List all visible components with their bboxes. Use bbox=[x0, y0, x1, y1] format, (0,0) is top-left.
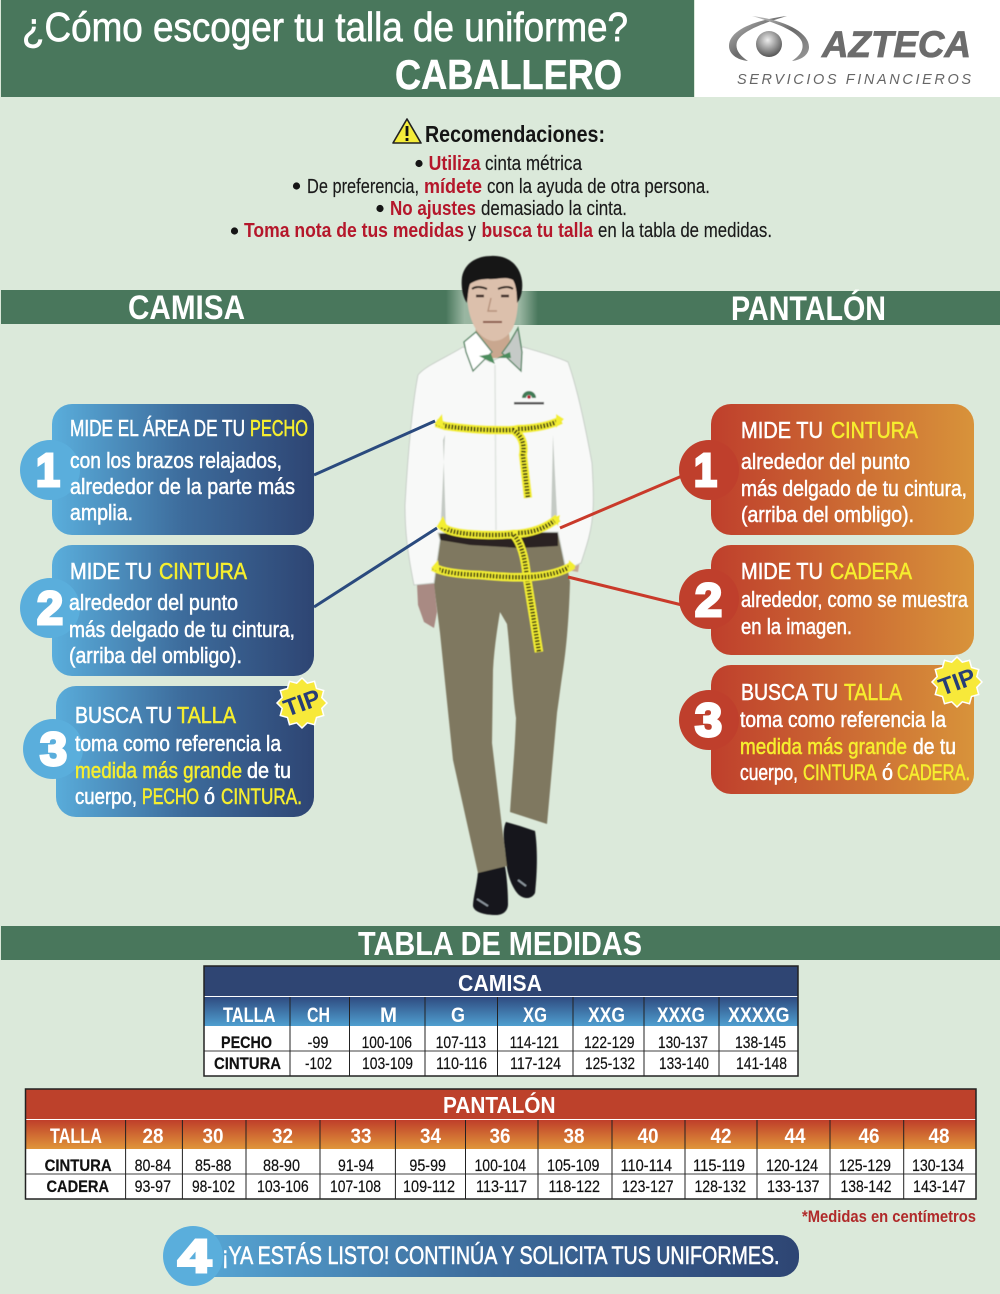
hair bbox=[462, 256, 522, 303]
subtitle: caballero: CABALLERO bbox=[395, 51, 622, 98]
recommendation 1: cinta métrica bbox=[485, 153, 583, 175]
recommendation 1: Utiliza bbox=[429, 153, 481, 175]
size header row: 33 bbox=[350, 1125, 372, 1148]
cadera row: 93-97 bbox=[135, 1177, 171, 1196]
step heading: BUSCA TU bbox=[741, 679, 838, 705]
size header row: 34 bbox=[420, 1125, 441, 1148]
facial features bbox=[472, 287, 513, 322]
cintura row: 125-129 bbox=[839, 1156, 891, 1175]
cadera row bbox=[46, 1177, 966, 1196]
cintura row: 130-134 bbox=[912, 1156, 964, 1175]
step heading: PECHO bbox=[250, 415, 308, 441]
cintura row: CINTURA bbox=[214, 1054, 281, 1073]
table title: PANTALÓN bbox=[443, 1091, 556, 1118]
step text: CADERA. bbox=[897, 760, 970, 785]
step text bbox=[70, 448, 295, 525]
size header row: XXXXG bbox=[728, 1004, 790, 1027]
icon: tip badge: TIP bbox=[935, 663, 979, 702]
step heading: BUSCA TU bbox=[75, 702, 172, 728]
number 1: 1 bbox=[36, 444, 60, 496]
header banner bbox=[1, 0, 694, 98]
recommendation 4: Toma nota de tus medidas bbox=[244, 220, 464, 242]
cadera row: 133-137 bbox=[767, 1177, 820, 1196]
shirt shading bbox=[441, 435, 557, 530]
cadera row: 143-147 bbox=[913, 1177, 966, 1196]
step heading: TALLA bbox=[177, 702, 237, 728]
step heading bbox=[741, 558, 913, 584]
icon: tip badge: TIP bbox=[280, 684, 324, 723]
size header row: 42 bbox=[710, 1125, 732, 1148]
step text: amplia. bbox=[70, 500, 133, 525]
size header row: 48 bbox=[928, 1125, 950, 1148]
step heading bbox=[70, 558, 248, 584]
cadera row: 107-108 bbox=[330, 1177, 381, 1196]
pecho row bbox=[221, 1033, 786, 1052]
pecho row: 114-121 bbox=[510, 1033, 559, 1052]
step text: en la imagen. bbox=[741, 614, 852, 639]
step text: de tu bbox=[913, 734, 956, 759]
step text: más delgado de tu cintura, bbox=[741, 476, 967, 501]
shirt placket bbox=[495, 365, 496, 530]
number 3: 3 bbox=[695, 694, 722, 746]
recommendation 1 bbox=[415, 153, 583, 175]
step text bbox=[740, 707, 970, 785]
pecho row: PECHO bbox=[221, 1033, 272, 1052]
step text: (arriba del ombligo). bbox=[69, 643, 242, 668]
pecho row: 107-113 bbox=[436, 1033, 486, 1052]
step heading bbox=[741, 417, 919, 443]
cintura row: -102 bbox=[305, 1054, 332, 1073]
measuring tape: chest bbox=[434, 414, 564, 498]
panel: camisa step 2 bbox=[20, 545, 314, 676]
number 2: 2 bbox=[37, 582, 63, 634]
recommendations block bbox=[231, 119, 772, 242]
logo wordmark: AZTECA bbox=[821, 24, 971, 65]
number badge 3 bbox=[679, 690, 739, 750]
panel: pantalón step 1 bbox=[679, 404, 974, 535]
cadera row: 98-102 bbox=[192, 1177, 235, 1196]
shirt bbox=[405, 347, 593, 585]
recommendation 2: mídete bbox=[424, 176, 482, 198]
step text: ó bbox=[882, 760, 893, 785]
number 1: 1 bbox=[694, 444, 717, 496]
step text: (arriba del ombligo). bbox=[741, 502, 914, 527]
recommendations heading: Recomendaciones: bbox=[425, 121, 605, 147]
recommendation 4: y bbox=[468, 220, 476, 242]
cintura row: 103-109 bbox=[362, 1054, 413, 1073]
heading: tabla de medidas: TABLA DE MEDIDAS bbox=[358, 925, 642, 962]
panel: pantalón step 3 bbox=[679, 657, 982, 794]
cadera row: 113-117 bbox=[476, 1177, 527, 1196]
heading: camisa: CAMISA bbox=[128, 289, 245, 327]
size header row: TALLA bbox=[50, 1125, 102, 1148]
step text bbox=[69, 590, 295, 668]
icon: tip badge bbox=[277, 678, 327, 728]
cintura row: 141-148 bbox=[736, 1054, 787, 1073]
icon: logo emblem bbox=[729, 16, 809, 61]
size header row bbox=[50, 1125, 950, 1148]
size header row: XG bbox=[523, 1004, 547, 1027]
number badge 2 bbox=[679, 569, 739, 629]
cintura row: 117-124 bbox=[510, 1054, 561, 1073]
cintura row bbox=[214, 1054, 787, 1073]
step text: CINTURA bbox=[803, 760, 877, 785]
cadera row: CADERA bbox=[46, 1177, 109, 1196]
cintura row: 133-140 bbox=[659, 1054, 709, 1073]
cintura row: 110-116 bbox=[436, 1054, 487, 1073]
trousers bbox=[434, 532, 570, 873]
cintura row: 120-124 bbox=[766, 1156, 818, 1175]
table title: CAMISA bbox=[458, 970, 542, 996]
step heading: MIDE EL ÁREA DE TU bbox=[70, 415, 245, 441]
number badge 3 bbox=[23, 719, 83, 779]
size header row: G bbox=[451, 1004, 465, 1027]
cintura row: 88-90 bbox=[263, 1156, 300, 1175]
step text: cuerpo, bbox=[740, 760, 798, 785]
step heading: CINTURA bbox=[159, 558, 248, 584]
step text: alrededor de la parte más bbox=[70, 474, 295, 499]
size header row: M bbox=[380, 1004, 397, 1027]
cintura row: CINTURA bbox=[45, 1156, 112, 1175]
left hand bbox=[417, 582, 437, 628]
pecho row: 100-106 bbox=[362, 1033, 412, 1052]
step text: ó bbox=[204, 784, 215, 809]
recommendation 4: busca tu talla bbox=[482, 220, 594, 242]
recommendation 3 bbox=[376, 198, 627, 220]
table: camisa bbox=[204, 966, 798, 1076]
cadera row: 128-132 bbox=[694, 1177, 746, 1196]
footnote: *Medidas en centímetros bbox=[802, 1207, 976, 1226]
cintura row: 125-132 bbox=[585, 1054, 635, 1073]
step text: medida más grande bbox=[740, 734, 907, 759]
section band: tabla de medidas bbox=[1, 925, 1000, 962]
step text: toma como referencia la bbox=[740, 707, 947, 732]
step heading: MIDE TU bbox=[741, 417, 823, 443]
cintura row: 85-88 bbox=[195, 1156, 232, 1175]
step heading: MIDE TU bbox=[70, 558, 152, 584]
measuring tape: hip bbox=[431, 560, 576, 577]
icon: warning triangle bbox=[393, 119, 421, 143]
measuring tape: waist bbox=[437, 515, 560, 652]
heading: pantalón: PANTALÓN bbox=[731, 290, 886, 328]
panel: camisa step 1 bbox=[20, 404, 314, 535]
step text bbox=[75, 731, 302, 809]
cintura row: 80-84 bbox=[135, 1156, 171, 1175]
step text: toma como referencia la bbox=[75, 731, 282, 756]
size header row: 30 bbox=[202, 1125, 224, 1148]
step text: cuerpo, bbox=[75, 784, 137, 809]
size header row: XXXG bbox=[657, 1004, 705, 1027]
size header row: 44 bbox=[784, 1125, 806, 1148]
number 3: 3 bbox=[40, 723, 67, 775]
recommendation 2: con la ayuda de otra persona. bbox=[487, 176, 710, 198]
step text: medida más grande bbox=[75, 758, 242, 783]
step text: alrededor del punto bbox=[69, 590, 238, 615]
collar bbox=[464, 328, 522, 371]
step heading: CADERA bbox=[830, 558, 913, 584]
step text: más delgado de tu cintura, bbox=[69, 617, 295, 642]
cadera row: 109-112 bbox=[403, 1177, 455, 1196]
number badge 1 bbox=[20, 440, 80, 500]
shirt logo bbox=[514, 391, 544, 404]
pecho row: 130-137 bbox=[658, 1033, 708, 1052]
step text: CINTURA. bbox=[221, 784, 302, 809]
banner text: ¡YA ESTÁS LISTO! CONTINÚA Y SOLICITA TUS UNIFORMES. bbox=[222, 1241, 780, 1270]
cadera row: 118-122 bbox=[548, 1177, 600, 1196]
pecho row: 122-129 bbox=[584, 1033, 635, 1052]
panel: camisa step 3 bbox=[23, 678, 327, 817]
logo: Azteca Servicios Financieros bbox=[695, 0, 1000, 97]
step text: de tu bbox=[247, 758, 291, 783]
cintura row: 115-119 bbox=[693, 1156, 745, 1175]
cintura row: 105-109 bbox=[547, 1156, 600, 1175]
logo tagline: SERVICIOS FINANCIEROS bbox=[737, 72, 971, 88]
step text bbox=[741, 587, 969, 639]
panel: pantalón step 2 bbox=[679, 545, 974, 655]
cintura row: 110-114 bbox=[620, 1156, 672, 1175]
size header row bbox=[223, 1004, 790, 1027]
recommendation 3: demasiado la cinta. bbox=[481, 198, 627, 220]
step heading: TALLA bbox=[844, 679, 903, 705]
size header row: TALLA bbox=[223, 1004, 276, 1027]
cintura row: 95-99 bbox=[409, 1156, 446, 1175]
pecho row: 138-145 bbox=[735, 1033, 786, 1052]
cadera row: 138-142 bbox=[840, 1177, 892, 1196]
size header row: 28 bbox=[142, 1125, 164, 1148]
number badge 1 bbox=[679, 440, 739, 500]
size header row: CH bbox=[307, 1004, 330, 1027]
cadera row: 123-127 bbox=[622, 1177, 674, 1196]
number 2: 2 bbox=[695, 574, 722, 626]
callout: step 4 banner bbox=[163, 1226, 799, 1286]
size header row: 40 bbox=[638, 1125, 658, 1148]
size header row: 36 bbox=[490, 1125, 510, 1148]
shoes bbox=[473, 822, 537, 915]
neck bbox=[474, 325, 512, 358]
step text: alrededor del punto bbox=[741, 449, 910, 474]
figure: man in shirt and trousers bbox=[405, 256, 593, 915]
step heading: CINTURA bbox=[831, 417, 919, 443]
right hand bbox=[563, 555, 580, 572]
number 4: 4 bbox=[178, 1230, 212, 1282]
size header row: XXG bbox=[588, 1004, 625, 1027]
cadera row: 103-106 bbox=[257, 1177, 309, 1196]
recommendation 2 bbox=[293, 176, 710, 198]
cintura row bbox=[45, 1156, 964, 1175]
title: ¿Cómo escoger tu talla de uniforme? bbox=[22, 4, 628, 50]
size header row: 38 bbox=[564, 1125, 585, 1148]
step text: con los brazos relajados, bbox=[70, 448, 282, 473]
table: pantalón bbox=[25, 1089, 976, 1199]
recommendation 3: No ajustes bbox=[390, 198, 476, 220]
step text bbox=[741, 449, 967, 527]
cintura row: 100-104 bbox=[474, 1156, 526, 1175]
number badge 2 bbox=[20, 578, 80, 638]
number badge 4 bbox=[163, 1226, 223, 1286]
recommendation 2: De preferencia, bbox=[307, 176, 419, 198]
cintura row: 91-94 bbox=[338, 1156, 374, 1175]
recommendation 4 bbox=[231, 220, 772, 242]
face bbox=[467, 270, 518, 341]
step text: PECHO bbox=[142, 784, 199, 809]
pecho row: -99 bbox=[308, 1033, 328, 1052]
step heading: MIDE TU bbox=[741, 558, 823, 584]
section band: camisa / pantalón bbox=[1, 289, 1000, 328]
size header row: 32 bbox=[272, 1125, 293, 1148]
belt bbox=[440, 532, 558, 548]
connector lines bbox=[314, 421, 682, 607]
recommendation 4: en la tabla de medidas. bbox=[598, 220, 772, 242]
size header row: 46 bbox=[858, 1125, 880, 1148]
icon: tip badge bbox=[932, 657, 982, 707]
